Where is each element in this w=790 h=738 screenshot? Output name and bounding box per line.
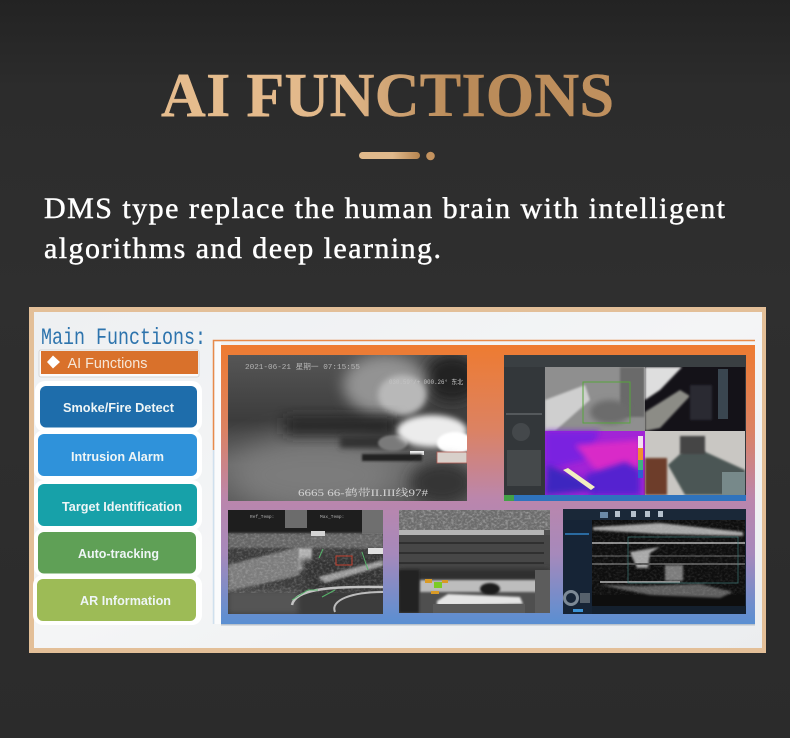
subtitle <box>44 192 726 265</box>
panel: main functions screenshot <box>29 307 766 653</box>
subtitle: DMS type replace the human brain with intelligent <box>44 192 726 225</box>
photo: thermal road junction with AR overlays: Max_Temp: <box>320 514 344 520</box>
menu header: AI functions <box>39 350 199 377</box>
menu item: smoke/fire detect: Smoke/Fire Detect <box>63 401 175 415</box>
channel: grey interior <box>545 367 645 431</box>
menu item: AR information <box>33 575 202 625</box>
title: AI FUNCTIONS <box>161 62 614 130</box>
photo: thermal wildfire smoke: 030.59°/+ 000.26° 东北 <box>389 377 463 386</box>
channel: dark machinery <box>645 367 745 431</box>
menu item: smoke/fire detect <box>35 381 202 432</box>
photo: thermal wildfire smoke: 6665 66-鹤带II.III线97# <box>298 487 428 499</box>
menu item: auto-tracking: Auto-tracking <box>78 547 159 561</box>
screenshot: four-channel monitoring software <box>504 355 746 501</box>
photo: thermal road junction with AR overlays <box>228 510 383 614</box>
title divider <box>359 152 435 160</box>
menu item: target identification: Target Identification <box>62 500 182 514</box>
channel: thermal heat map <box>545 431 645 495</box>
menu item: intrusion alarm: Intrusion Alarm <box>71 450 164 464</box>
menu item: intrusion alarm <box>34 430 202 480</box>
menu item: auto-tracking <box>34 528 202 577</box>
menu item: target identification <box>34 480 202 530</box>
heading: main functions: Main Functions: <box>41 325 206 351</box>
photo: thermal wildfire smoke <box>228 355 467 501</box>
photo: thermal wildfire smoke: 2021-06-21 星期一 07:15:55 <box>245 362 361 372</box>
channel: industrial hall <box>645 431 745 495</box>
photo: thermal road junction with AR overlays: Ref_Temp: <box>250 514 274 520</box>
menu header: AI functions: AI Functions <box>68 356 148 372</box>
screenshot: perimeter monitoring software <box>563 509 746 614</box>
menu: function list <box>33 350 202 625</box>
photo: building with detected vehicles <box>399 510 550 613</box>
subtitle: algorithms and deep learning. <box>44 232 441 265</box>
menu item: AR information: AR Information <box>80 594 171 608</box>
panel: video gallery <box>214 340 755 626</box>
